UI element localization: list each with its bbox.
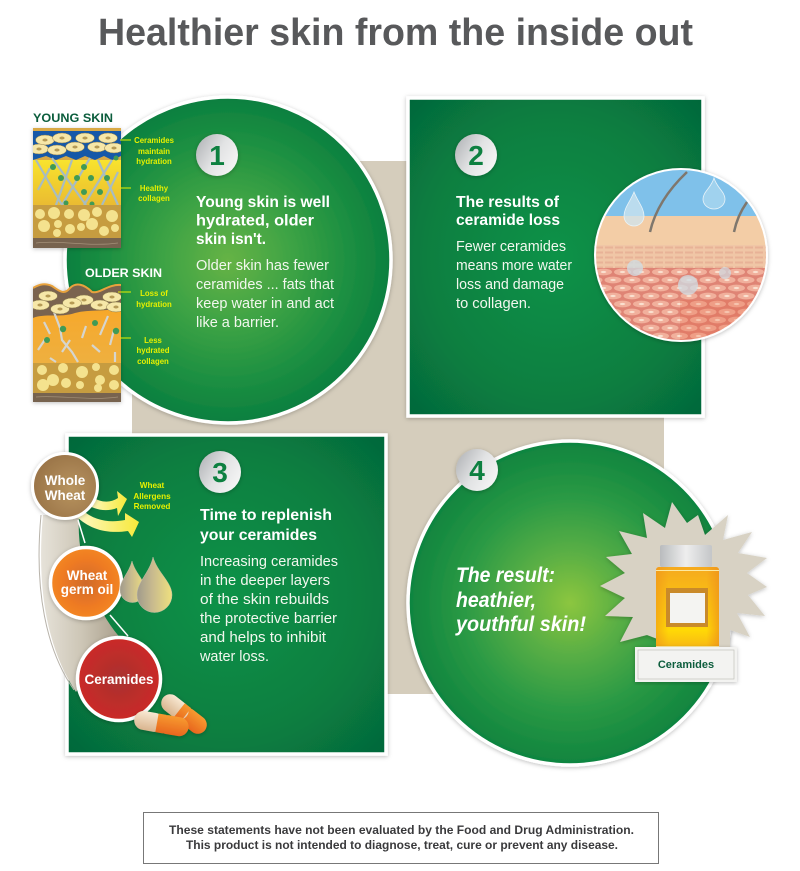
circle background 4 <box>408 441 732 765</box>
wheat allergens label: Allergens <box>133 492 171 501</box>
body 2: Fewer ceramides <box>456 239 566 255</box>
young skin labels: hydration <box>136 157 172 166</box>
body 3: and helps to inhibit <box>200 630 326 646</box>
older skin labels: hydrated <box>137 346 170 355</box>
badge 2 <box>455 134 497 176</box>
wheat allergens label: Wheat <box>140 481 165 490</box>
wheat germ oil circle: Wheat <box>67 568 108 583</box>
body 3: in the deeper layers <box>200 573 330 589</box>
young skin labels: Ceramides <box>134 136 175 145</box>
body 1: Older skin has fewer <box>196 258 329 274</box>
young skin labels: Healthy <box>140 184 169 193</box>
body 1: ceramides ... fats that <box>196 277 334 293</box>
older skin labels: collagen <box>137 357 169 366</box>
panel 3: replenish ceramides <box>32 435 386 754</box>
oil drops <box>120 557 172 612</box>
badge 1 <box>196 134 238 176</box>
body 3: the protective barrier <box>200 611 337 627</box>
badge 3: 3 <box>212 457 228 488</box>
heading 2: The results of <box>456 194 560 211</box>
badge 1: 1 <box>209 140 225 171</box>
body 2: to collagen. <box>456 296 531 312</box>
panel 1: young vs older skin <box>30 97 391 423</box>
result text: The result: <box>456 564 555 587</box>
panel background 3 <box>67 435 386 754</box>
disclaimer box: These statements have not been evaluated by the Food and Drug Administration. <box>169 825 634 837</box>
badge 4: 4 <box>469 455 485 486</box>
young skin labels: maintain <box>138 147 170 156</box>
badge 4 <box>456 449 498 491</box>
body 1: keep water in and act <box>196 296 334 312</box>
heading 1: hydrated, older <box>196 212 314 230</box>
heading 3: Time to replenish <box>200 507 332 524</box>
ceramides circle <box>78 638 160 720</box>
skin cross-section circle <box>590 165 775 348</box>
bottle <box>656 545 719 652</box>
body 2: means more water <box>456 258 572 274</box>
heading 1: skin isn't. <box>196 231 266 248</box>
panel 4: result <box>408 441 767 765</box>
disclaimer box <box>144 812 658 864</box>
young skin illustration <box>30 128 124 248</box>
beige swoop <box>39 515 128 692</box>
body 3: of the skin rebuilds <box>200 592 329 608</box>
result text: heathier, <box>456 589 536 612</box>
wheat germ oil circle: germ oil <box>61 582 113 597</box>
wheat allergens label: Removed <box>134 502 170 511</box>
panel background 2 <box>408 98 703 416</box>
background beige shape <box>132 161 664 694</box>
whole wheat circle <box>32 454 98 518</box>
older skin heading: OLDER SKIN <box>85 266 162 280</box>
panel 2: ceramide loss <box>408 98 775 416</box>
body 3: Increasing ceramides <box>200 554 338 570</box>
whole wheat circle: Whole <box>45 473 86 488</box>
capsules <box>133 691 210 738</box>
heading 2: ceramide loss <box>456 212 560 229</box>
wheat germ oil circle <box>50 548 122 618</box>
body 2: loss and damage <box>456 277 564 293</box>
heading 1: Young skin is well <box>196 194 330 211</box>
circle background 1 <box>65 97 391 423</box>
badge 3 <box>199 451 241 493</box>
body 1: like a barrier. <box>196 315 279 331</box>
young skin labels <box>120 136 175 203</box>
result text: youthful skin! <box>455 613 586 636</box>
older skin labels: hydration <box>136 300 172 309</box>
badge 2: 2 <box>468 140 484 171</box>
older skin labels <box>118 289 172 366</box>
body 3: water loss. <box>199 649 269 665</box>
ceramides circle: Ceramides <box>84 672 154 687</box>
title: Healthier skin from the inside out <box>98 12 693 54</box>
whole wheat circle: Wheat <box>45 488 86 503</box>
older skin labels: Less <box>144 336 163 345</box>
young skin labels: collagen <box>138 194 170 203</box>
disclaimer box: This product is not intended to diagnose, treat, cure or prevent any disease. <box>186 840 618 852</box>
arrows: allergens removed <box>76 491 139 537</box>
older skin labels: Loss of <box>140 289 168 298</box>
older skin illustration <box>30 284 126 402</box>
ceramides banner <box>635 647 737 682</box>
young skin heading: YOUNG SKIN <box>33 111 113 125</box>
heading 3: your ceramides <box>200 527 317 544</box>
ceramides banner: Ceramides <box>658 659 714 671</box>
starburst <box>600 502 767 653</box>
